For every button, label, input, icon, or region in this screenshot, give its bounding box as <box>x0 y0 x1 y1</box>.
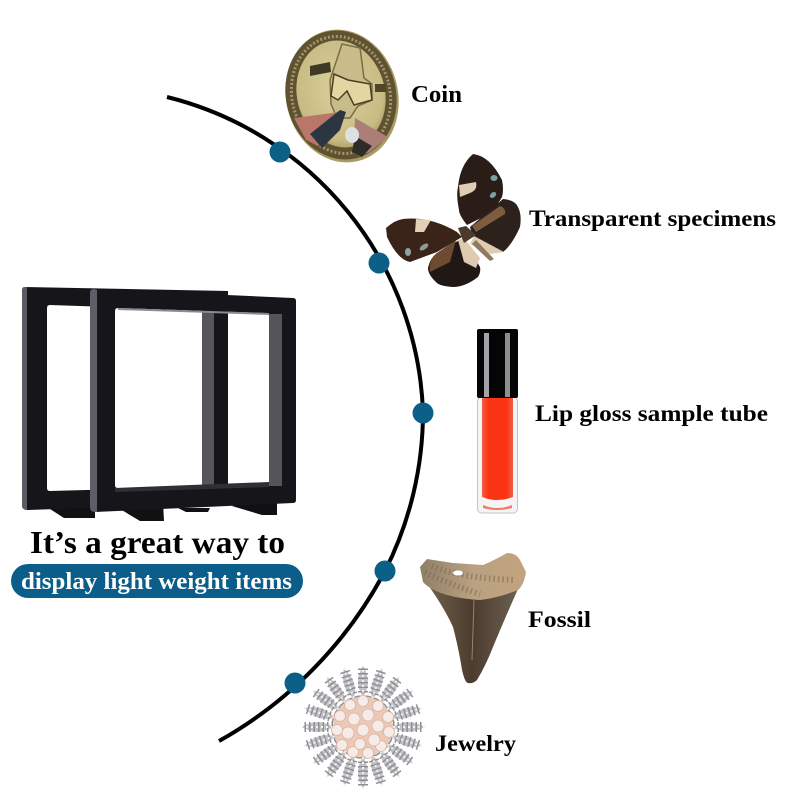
pill: display light weight items <box>11 564 303 598</box>
back frame <box>22 287 228 510</box>
icon: jewelry brooch <box>301 665 425 789</box>
timeline dot: jewelry <box>284 672 306 694</box>
timeline dot: coin <box>270 142 290 162</box>
timeline dot: lip gloss <box>412 402 434 424</box>
front frame feet <box>120 497 277 521</box>
timeline dot: fossil <box>374 560 396 582</box>
label: Jewelry: Jewelry <box>435 731 517 756</box>
timeline dot: specimens <box>368 252 390 274</box>
icon: butterfly <box>386 154 521 287</box>
icon: display frames <box>22 287 296 521</box>
label: Lip gloss sample tube: Lip gloss sample tube <box>535 401 768 426</box>
label: Coin: Coin <box>411 81 462 108</box>
icon: coin <box>271 17 413 175</box>
icon: shark tooth fossil <box>420 553 526 683</box>
front frame <box>90 289 296 512</box>
curved timeline <box>167 97 423 741</box>
back frame feet <box>50 497 95 518</box>
label: Fossil: Fossil <box>528 607 591 632</box>
label: Transparent specimens: Transparent specimens <box>529 206 776 231</box>
heading: It's a great way to: It’s a great way to <box>30 524 285 560</box>
pill: display light weight items: display light weight items <box>21 569 292 595</box>
icon: lip gloss tube <box>477 329 518 513</box>
